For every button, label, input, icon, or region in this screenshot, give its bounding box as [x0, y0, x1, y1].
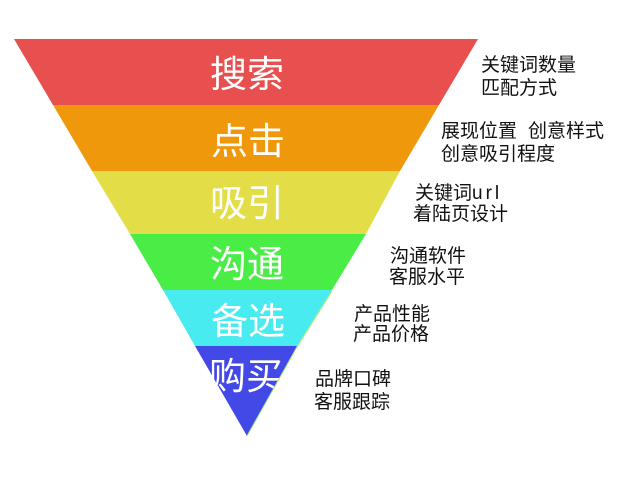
note: 购买: 客服跟踪 [314, 391, 390, 413]
band: 购买 [195, 346, 297, 436]
note: 沟通: 客服水平 [389, 266, 465, 288]
band: 吸引 [92, 171, 400, 234]
band: 备选 [163, 290, 332, 346]
note: 吸引 [413, 182, 508, 225]
note: 沟通 [389, 245, 466, 288]
band: 点击: 点击 [211, 121, 285, 162]
band: 搜索: 搜索 [210, 54, 284, 95]
band: 购买: 购买 [209, 356, 283, 397]
band: 备选: 备选 [211, 301, 285, 342]
note: 搜索 [481, 54, 576, 99]
note: 吸引: 关键词url [415, 182, 502, 204]
note: 点击: 创意吸引程度 [441, 143, 555, 165]
band: 沟通: 沟通 [210, 244, 284, 285]
note: 购买: 品牌口碑 [315, 368, 391, 390]
band: 沟通 [130, 234, 366, 290]
note: 点击: 展现位置 [441, 121, 517, 142]
note: 购买 [314, 368, 391, 413]
note: 搜索: 关键词数量 [481, 54, 576, 76]
band: 点击 [53, 105, 439, 171]
note: 点击: 创意样式 [528, 120, 604, 142]
band: 吸引: 吸引 [210, 183, 284, 224]
funnel right edge highlight [247, 291, 332, 436]
note: 吸引: 着陆页设计 [413, 203, 508, 225]
note: 点击 [441, 120, 604, 165]
note: 沟通: 沟通软件 [390, 245, 466, 267]
band: 搜索 [14, 39, 478, 105]
funnel [14, 39, 478, 436]
note: 备选: 产品价格 [353, 323, 429, 345]
note: 备选: 产品性能 [354, 303, 430, 325]
note: 搜索: 匹配方式 [481, 77, 557, 99]
note: 备选 [353, 303, 430, 345]
